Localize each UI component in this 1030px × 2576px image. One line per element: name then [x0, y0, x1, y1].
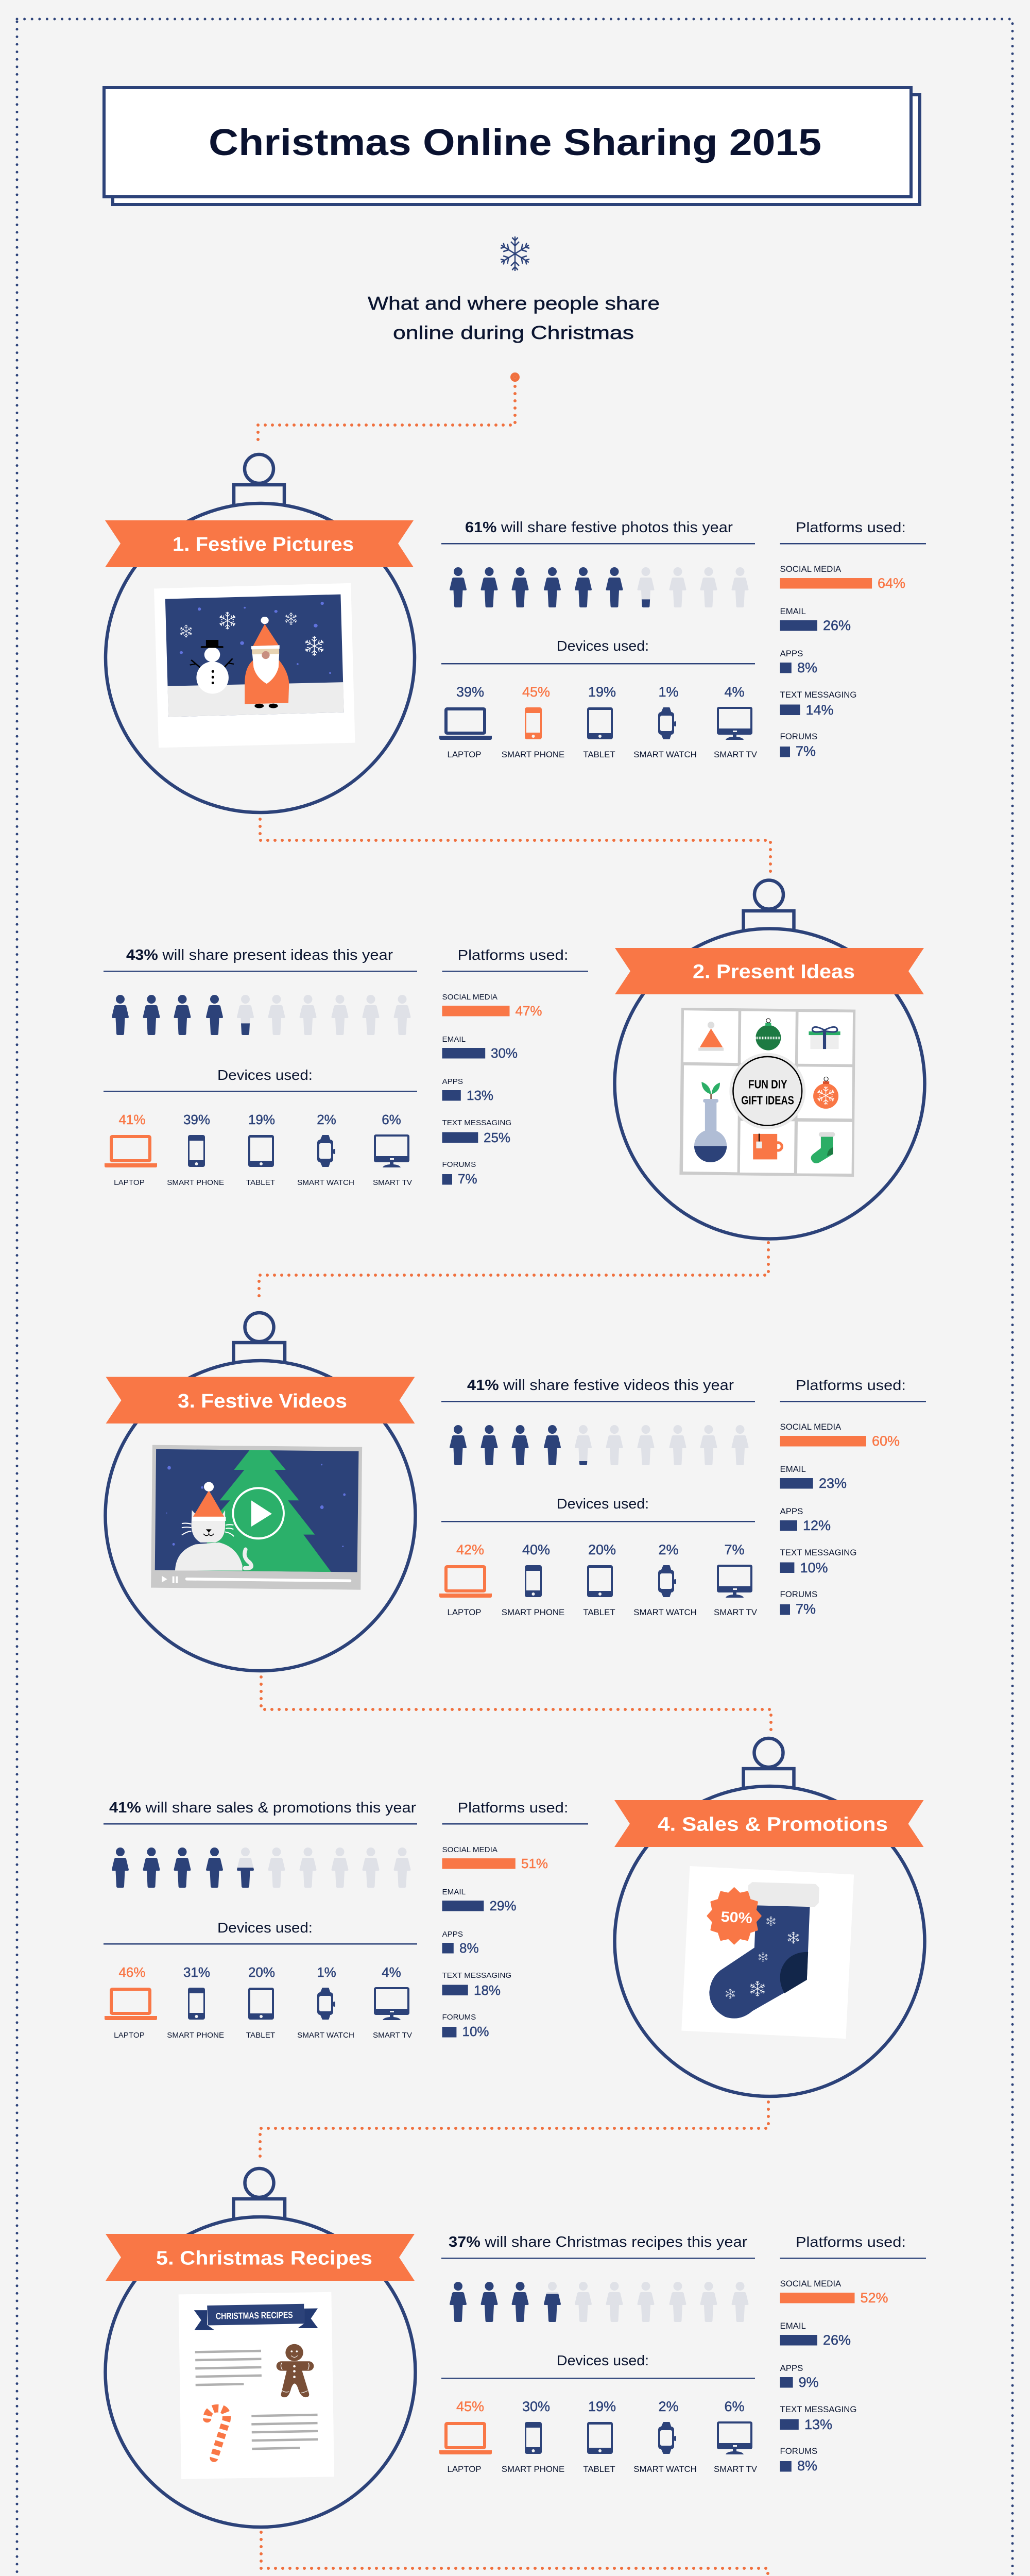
- people pictogram 41%: [450, 1425, 749, 1465]
- platforms bar chart: 9%: [798, 2375, 819, 2390]
- platforms bar chart: EMAIL: [780, 1464, 806, 1474]
- title: Christmas Online Sharing 2015: [209, 122, 821, 163]
- illustration: polaroid of snowman and Santa: [154, 583, 355, 748]
- headline: 37% will share Christmas recipes this year: [449, 2234, 747, 2250]
- platforms bar chart: [780, 564, 905, 759]
- platforms bar chart: EMAIL: [780, 2321, 806, 2331]
- devices row: [439, 2399, 758, 2474]
- people pictogram 41%: [112, 1848, 411, 1888]
- devices row: SMART TV: [714, 1607, 758, 1617]
- platforms bar chart: 64%: [878, 575, 905, 591]
- platforms bar chart: EMAIL: [780, 606, 806, 616]
- illustration: recipe page: CHRISTMAS RECIPES: [216, 2310, 293, 2321]
- devices row: SMART PHONE: [502, 2464, 564, 2474]
- devices row: 7%: [724, 1542, 745, 1557]
- platforms bar chart: [442, 993, 542, 1187]
- devices row: 41%: [118, 1112, 146, 1127]
- devices row: 1%: [317, 1964, 336, 1980]
- platforms bar chart: 8%: [797, 660, 817, 675]
- people pictogram 43%: [112, 995, 411, 1035]
- devices row: 19%: [588, 684, 616, 700]
- platforms bar chart: [780, 2279, 888, 2473]
- panel: stats for Christmas Recipes: [439, 2234, 926, 2474]
- heading: platforms: Platforms used:: [796, 1377, 906, 1393]
- devices row: 45%: [522, 684, 550, 700]
- platforms bar chart: 13%: [804, 2417, 832, 2432]
- banner: [105, 520, 414, 567]
- devices row: 4%: [724, 684, 745, 700]
- ornament 4: Sales & Promotions: [614, 1738, 925, 2096]
- devices row: 45%: [456, 2399, 484, 2414]
- illustration: stocking with discount badge: 50%: [720, 1909, 753, 1927]
- heading: devices: Devices used:: [557, 1496, 649, 1512]
- people pictogram 37%: [450, 2282, 749, 2322]
- people pictogram 61%: [450, 567, 749, 607]
- platforms bar chart: SOCIAL MEDIA: [780, 564, 842, 574]
- devices row: SMART PHONE: [502, 750, 564, 759]
- title box: [104, 88, 920, 205]
- devices row: SMART TV: [714, 2464, 758, 2474]
- platforms bar chart: APPS: [780, 649, 803, 658]
- banner: [106, 2234, 415, 2281]
- devices row: LAPTOP: [448, 2464, 481, 2474]
- devices row: 6%: [382, 1112, 401, 1127]
- devices row: SMART WATCH: [297, 1178, 354, 1187]
- platforms bar chart: 14%: [805, 702, 834, 718]
- devices row: LAPTOP: [114, 1178, 145, 1187]
- devices row: LAPTOP: [448, 750, 481, 759]
- devices row: SMART TV: [373, 1178, 413, 1187]
- ornament 3: Festive Videos: [105, 1313, 415, 1671]
- platforms bar chart: 51%: [521, 1856, 548, 1871]
- platforms bar chart: SOCIAL MEDIA: [442, 993, 498, 1002]
- platforms bar chart: 7%: [796, 743, 816, 759]
- platforms bar chart: EMAIL: [442, 1888, 466, 1896]
- heading: platforms: Platforms used:: [457, 947, 569, 963]
- banner: [106, 1377, 415, 1423]
- headline: 61% will share festive photos this year: [465, 519, 733, 536]
- icon: snowflake: [499, 236, 531, 271]
- devices row: [439, 684, 758, 759]
- devices row: 1%: [658, 684, 679, 700]
- platforms bar chart: SOCIAL MEDIA: [780, 1422, 842, 1432]
- banner: [614, 1800, 924, 1847]
- platforms bar chart: TEXT MESSAGING: [442, 1971, 511, 1980]
- ornament 5: Christmas Recipes: [105, 2168, 415, 2527]
- devices row: TABLET: [583, 1607, 615, 1617]
- platforms bar chart: TEXT MESSAGING: [780, 1548, 856, 1557]
- devices row: SMART WATCH: [633, 750, 697, 759]
- devices row: TABLET: [246, 2031, 275, 2040]
- connector dots: [258, 376, 771, 2576]
- platforms bar chart: 47%: [515, 1003, 542, 1019]
- devices row: 2%: [658, 1542, 679, 1557]
- platforms bar chart: 8%: [797, 2458, 817, 2473]
- illustration: gift ideas grid: FUN DIY: [748, 1078, 787, 1091]
- platforms bar chart: FORUMS: [780, 732, 817, 741]
- platforms bar chart: EMAIL: [442, 1035, 466, 1044]
- devices row: TABLET: [583, 750, 615, 759]
- platforms bar chart: APPS: [442, 1077, 463, 1086]
- devices row: 30%: [522, 2399, 550, 2414]
- platforms bar chart: TEXT MESSAGING: [442, 1118, 511, 1127]
- illustration: stocking with discount badge: [681, 1866, 854, 2039]
- devices row: [105, 1112, 413, 1187]
- platforms bar chart: 10%: [462, 2024, 489, 2039]
- devices row: 42%: [456, 1542, 484, 1557]
- heading: devices: Devices used:: [557, 2352, 649, 2368]
- devices row: 19%: [248, 1112, 275, 1127]
- platforms bar chart: APPS: [780, 2363, 803, 2373]
- devices row: SMART TV: [373, 2031, 413, 2040]
- devices row: 39%: [456, 684, 484, 700]
- platforms bar chart: 7%: [458, 1171, 477, 1187]
- devices row: TABLET: [583, 2464, 615, 2474]
- devices row: 39%: [183, 1112, 210, 1127]
- platforms bar chart: [442, 1845, 548, 2039]
- ornament 2: Present Ideas: [615, 880, 925, 1239]
- heading: devices: Devices used:: [217, 1920, 313, 1936]
- platforms bar chart: 26%: [823, 2332, 851, 2348]
- platforms bar chart: 25%: [484, 1130, 510, 1145]
- devices row: 2%: [658, 2399, 679, 2414]
- platforms bar chart: FORUMS: [780, 2446, 817, 2456]
- subtitle: What and where people share: [368, 293, 660, 314]
- banner: [615, 948, 924, 994]
- platforms bar chart: SOCIAL MEDIA: [442, 1845, 498, 1854]
- panel: stats for Sales & Promotions: [104, 1800, 588, 2040]
- banner title: 5. Christmas Recipes: [156, 2247, 372, 2269]
- devices row: 20%: [588, 1542, 616, 1557]
- devices row: SMART PHONE: [502, 1607, 564, 1617]
- platforms bar chart: TEXT MESSAGING: [780, 690, 856, 700]
- devices row: SMART PHONE: [167, 1178, 224, 1187]
- illustration: recipe page: [179, 2292, 334, 2479]
- devices row: 6%: [724, 2399, 745, 2414]
- devices row: 46%: [118, 1964, 146, 1980]
- banner title: 2. Present Ideas: [693, 961, 855, 983]
- devices row: 31%: [183, 1964, 210, 1980]
- devices row: LAPTOP: [114, 2031, 145, 2040]
- devices row: LAPTOP: [448, 1607, 481, 1617]
- platforms bar chart: FORUMS: [442, 1160, 476, 1169]
- illustration: gift ideas grid: [679, 1008, 855, 1177]
- platforms bar chart: 12%: [803, 1518, 831, 1533]
- panel: stats for Festive Videos: [439, 1377, 926, 1617]
- devices row: 19%: [588, 2399, 616, 2414]
- devices row: 4%: [382, 1964, 401, 1980]
- headline: 41% will share sales & promotions this year: [109, 1800, 416, 1816]
- platforms bar chart: 60%: [872, 1433, 900, 1449]
- platforms bar chart: 8%: [459, 1940, 479, 1956]
- platforms bar chart: 10%: [800, 1560, 828, 1575]
- banner title: 3. Festive Videos: [178, 1391, 347, 1412]
- devices row: SMART WATCH: [297, 2031, 354, 2040]
- ornament 1: Festive Pictures: [105, 454, 415, 812]
- platforms bar chart: 7%: [796, 1601, 816, 1617]
- platforms bar chart: 52%: [860, 2290, 888, 2306]
- platforms bar chart: TEXT MESSAGING: [780, 2404, 856, 2414]
- devices row: [439, 1542, 758, 1617]
- panel: stats for Present Ideas: [104, 947, 588, 1187]
- heading: platforms: Platforms used:: [796, 519, 906, 535]
- platforms bar chart: APPS: [780, 1506, 803, 1516]
- subtitle: [368, 293, 660, 343]
- devices row: 40%: [522, 1542, 550, 1557]
- devices row: TABLET: [246, 1178, 275, 1187]
- platforms bar chart: FORUMS: [442, 2013, 476, 2022]
- platforms bar chart: FORUMS: [780, 1589, 817, 1599]
- heading: devices: Devices used:: [557, 638, 649, 654]
- platforms bar chart: [780, 1422, 900, 1617]
- headline: 43% will share present ideas this year: [126, 947, 393, 963]
- panel: stats for Festive Pictures: [439, 519, 926, 759]
- platforms bar chart: SOCIAL MEDIA: [780, 2279, 842, 2289]
- heading: platforms: Platforms used:: [457, 1800, 569, 1816]
- banner title: 1. Festive Pictures: [173, 534, 354, 555]
- devices row: SMART TV: [714, 750, 758, 759]
- devices row: 20%: [248, 1964, 275, 1980]
- platforms bar chart: 30%: [491, 1045, 518, 1061]
- platforms bar chart: 29%: [489, 1898, 517, 1913]
- heading: devices: Devices used:: [217, 1067, 313, 1083]
- devices row: SMART WATCH: [633, 1607, 697, 1617]
- banner title: 4. Sales & Promotions: [658, 1814, 888, 1835]
- platforms bar chart: 13%: [467, 1088, 493, 1103]
- devices row: SMART WATCH: [633, 2464, 697, 2474]
- platforms bar chart: APPS: [442, 1930, 463, 1939]
- devices row: [105, 1964, 413, 2040]
- platforms bar chart: 23%: [819, 1476, 847, 1491]
- illustration: gift ideas grid: GIFT IDEAS: [741, 1093, 794, 1107]
- headline: 41% will share festive videos this year: [467, 1377, 734, 1394]
- platforms bar chart: 18%: [474, 1982, 501, 1998]
- platforms bar chart: 26%: [823, 618, 851, 633]
- devices row: SMART PHONE: [167, 2031, 224, 2040]
- subtitle: online during Christmas: [393, 322, 634, 343]
- illustration: video player: [151, 1445, 362, 1590]
- heading: platforms: Platforms used:: [796, 2234, 906, 2250]
- devices row: 2%: [317, 1112, 336, 1127]
